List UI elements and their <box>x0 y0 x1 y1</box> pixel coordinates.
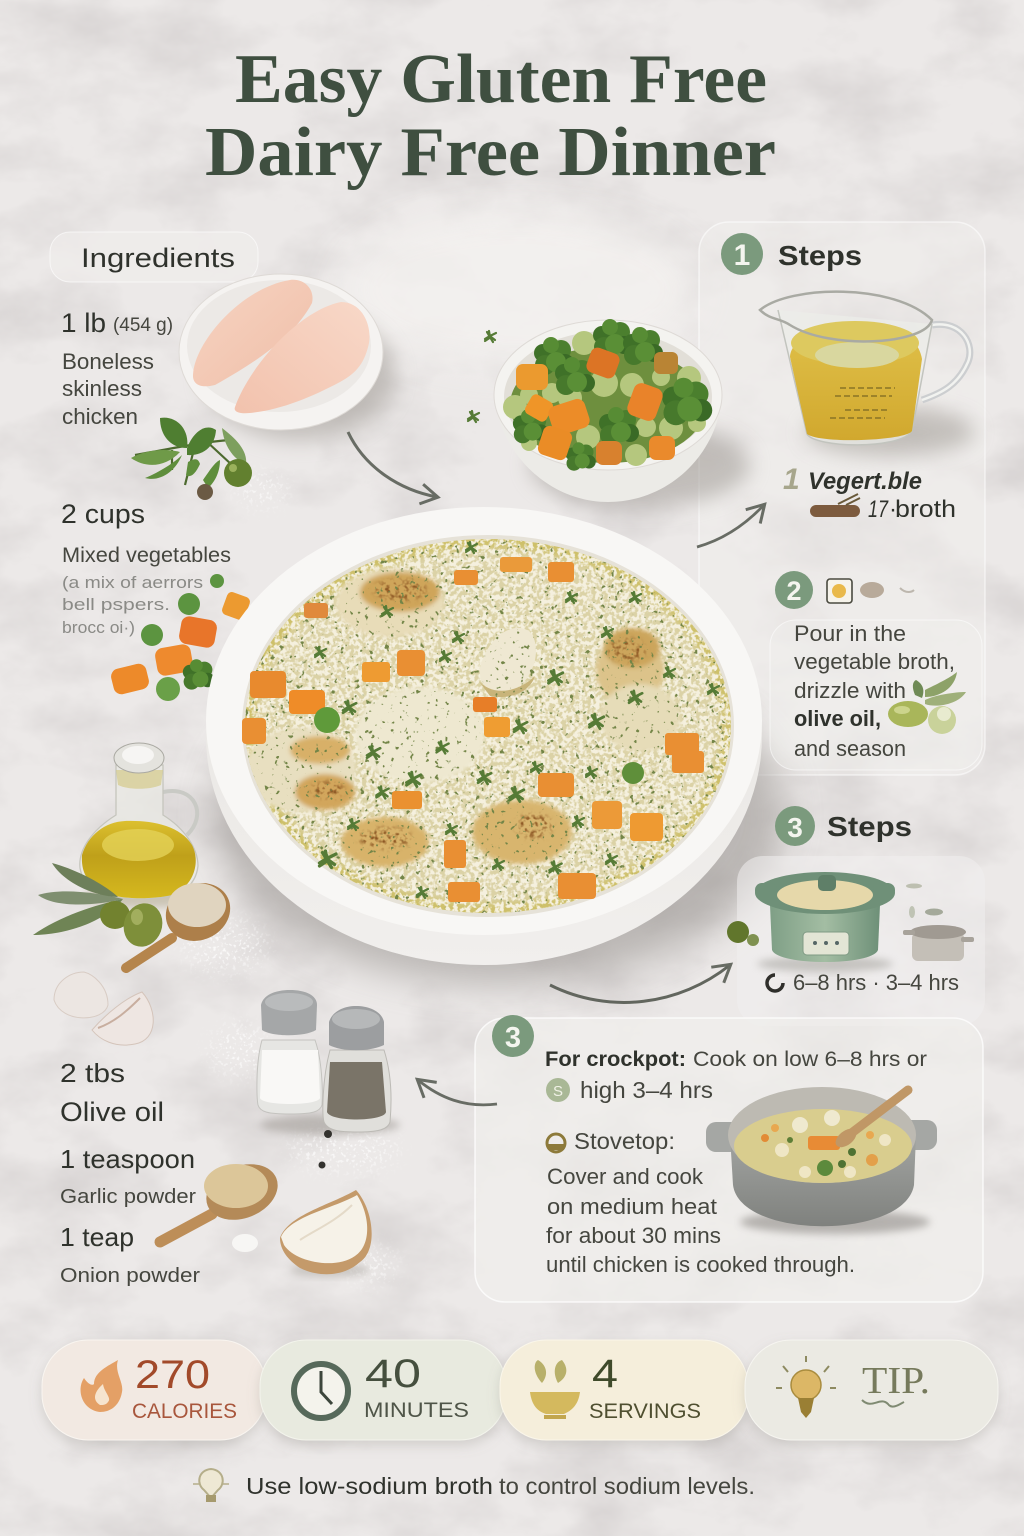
crockpot text: Cook on low 6–8 hrs or <box>693 1048 927 1071</box>
ingredient: seasonings text: 2 tbs <box>60 1058 125 1088</box>
illustration: stovetop pot <box>706 1087 937 1234</box>
card: calories: CALORIES <box>132 1400 237 1423</box>
stat cards row <box>42 1340 998 1440</box>
step 1 header: 1 <box>734 239 750 272</box>
illustration: vegetable bowl <box>494 319 750 507</box>
arrow: dish to slow cooker <box>550 965 730 1002</box>
step 1 label: 17 <box>868 496 889 523</box>
ingredient: vegetables text <box>61 499 231 637</box>
herb garnish <box>315 542 719 898</box>
panel: steps 1 and 2 background <box>699 222 985 775</box>
illustration: herb sprig and olive <box>131 418 246 488</box>
stovetop text: Cover and cook <box>547 1164 704 1189</box>
step 1 label: 1 <box>783 463 800 496</box>
stovetop text <box>546 1128 855 1277</box>
main dish <box>206 507 785 985</box>
illustration: small pot <box>903 884 974 961</box>
step 2 instructions: drizzle with <box>794 678 906 703</box>
illustration: measuring cup of broth <box>760 292 975 456</box>
title <box>205 41 776 191</box>
ingredient: seasonings text: Garlic powder <box>60 1186 196 1208</box>
card: tip: TIP. <box>862 1360 930 1402</box>
step 2 instructions <box>770 620 982 770</box>
crockpot text: For crockpot: <box>545 1048 686 1071</box>
illustration: olives and leaves <box>33 863 168 952</box>
step 1 header: Steps <box>778 240 862 271</box>
step 3 header <box>775 806 912 846</box>
illustration: onion <box>232 1190 372 1277</box>
illustration: chicken plate <box>179 274 396 441</box>
ingredient: chicken text <box>61 308 173 429</box>
illustration: scattered vegetables <box>109 574 251 701</box>
step 1 label <box>783 463 956 523</box>
light green pieces <box>503 331 706 466</box>
icon: olive and nut <box>197 459 252 500</box>
card: tip <box>745 1340 998 1440</box>
stovetop text: Stovetop: <box>574 1128 675 1154</box>
herb flecks on marble <box>468 331 496 422</box>
salt scatter <box>183 476 400 1281</box>
ingredient: vegetables text: 2 cups <box>61 499 145 529</box>
icon: olives and leaves <box>888 672 966 734</box>
broccoli <box>593 319 633 357</box>
ingredient: chicken text: (454 g) <box>113 315 173 336</box>
ingredient: seasonings text: 1 teap <box>60 1222 134 1252</box>
badge 3 <box>492 1015 534 1057</box>
title: Easy Gluten Free <box>235 41 767 118</box>
step 3 header: Steps <box>827 811 912 842</box>
chicken pieces <box>244 569 680 867</box>
panel: ingredients heading <box>50 232 258 282</box>
tip line: Use low-sodium broth <box>246 1473 493 1499</box>
step 2 instructions: and season <box>794 736 906 761</box>
panel: step 3 appliances <box>727 856 985 1026</box>
tip line <box>193 1469 755 1502</box>
icon: log <box>810 494 860 517</box>
ingredient: chicken text: 1 lb <box>61 308 106 338</box>
step 2 header and icons <box>775 571 914 609</box>
ingredient: seasonings text: 1 teaspoon <box>60 1144 195 1174</box>
card: servings <box>500 1340 748 1440</box>
timing text: 6–8 hrs · 3–4 hrs <box>793 970 959 995</box>
carrots <box>516 346 678 465</box>
crockpot text: high 3–4 hrs <box>580 1077 713 1103</box>
rice filling <box>240 535 736 920</box>
step 2 instructions: Pour in the <box>794 621 906 646</box>
icon: light bulb <box>193 1469 229 1502</box>
stovetop text: on medium heat <box>547 1194 717 1219</box>
ingredient: vegetables text: brocc oi·) <box>62 618 135 637</box>
stovetop text: until chicken is cooked through. <box>546 1252 855 1277</box>
card: minutes <box>260 1340 506 1440</box>
ingredient: chicken text: chicken <box>62 404 138 429</box>
illustration: spoon with powder <box>126 873 240 968</box>
ingredient: chicken text: skinless <box>62 376 142 401</box>
tip line: to control sodium levels. <box>499 1473 755 1499</box>
crockpot text: S <box>553 1083 563 1100</box>
ingredient: vegetables text: bell pspers. <box>62 595 170 614</box>
title: Dairy Free Dinner <box>205 114 776 191</box>
salt shaker <box>257 990 322 1114</box>
card: minutes: MINUTES <box>364 1399 469 1422</box>
ingredient: seasonings text: Olive oil <box>60 1097 164 1127</box>
pepper shaker <box>323 1006 391 1132</box>
step 2 instructions: olive oil, <box>794 706 881 731</box>
step 1 header <box>721 233 862 275</box>
arrow: to seasonings <box>418 1080 497 1105</box>
step 2 instructions: vegetable broth, <box>794 649 955 674</box>
ingredient: seasonings text: Onion powder <box>60 1265 200 1287</box>
panel: ingredients heading: Ingredients <box>81 243 235 273</box>
carrots <box>242 557 704 902</box>
panel: step 3 instructions <box>475 1015 983 1302</box>
ingredient: chicken text: Boneless <box>62 349 154 374</box>
illustration: garlic powder spoon <box>160 1154 286 1242</box>
icon: green olive <box>727 921 759 946</box>
arrow: dish to broth <box>697 505 764 547</box>
card: servings: SERVINGS <box>589 1400 701 1423</box>
step 3 header: 3 <box>787 812 803 843</box>
illustration: salt and pepper shakers <box>257 990 400 1168</box>
card: calories: 270 <box>135 1353 210 1397</box>
step 1 label: broth <box>895 496 956 523</box>
card: minutes: 40 <box>365 1352 421 1396</box>
card: calories <box>42 1340 266 1440</box>
crockpot text <box>545 1048 927 1103</box>
step 1 label: Vegert.ble <box>808 468 922 495</box>
card: servings: 4 <box>592 1352 618 1396</box>
step 2 header and icons: 2 <box>786 576 802 606</box>
illustration: garlic <box>54 972 153 1045</box>
ingredient: seasonings text <box>60 1058 200 1287</box>
step 1 label: · <box>889 496 897 523</box>
badge 3: 3 <box>505 1022 521 1054</box>
arrow: chicken to dish <box>348 432 437 497</box>
ingredient: vegetables text: (a mix of aerrors <box>62 573 203 592</box>
ingredient: vegetables text: Mixed vegetables <box>62 544 231 567</box>
stovetop text: for about 30 mins <box>546 1223 721 1248</box>
illustration: slow cooker <box>755 872 895 972</box>
illustration: olive oil bottle <box>80 743 205 908</box>
